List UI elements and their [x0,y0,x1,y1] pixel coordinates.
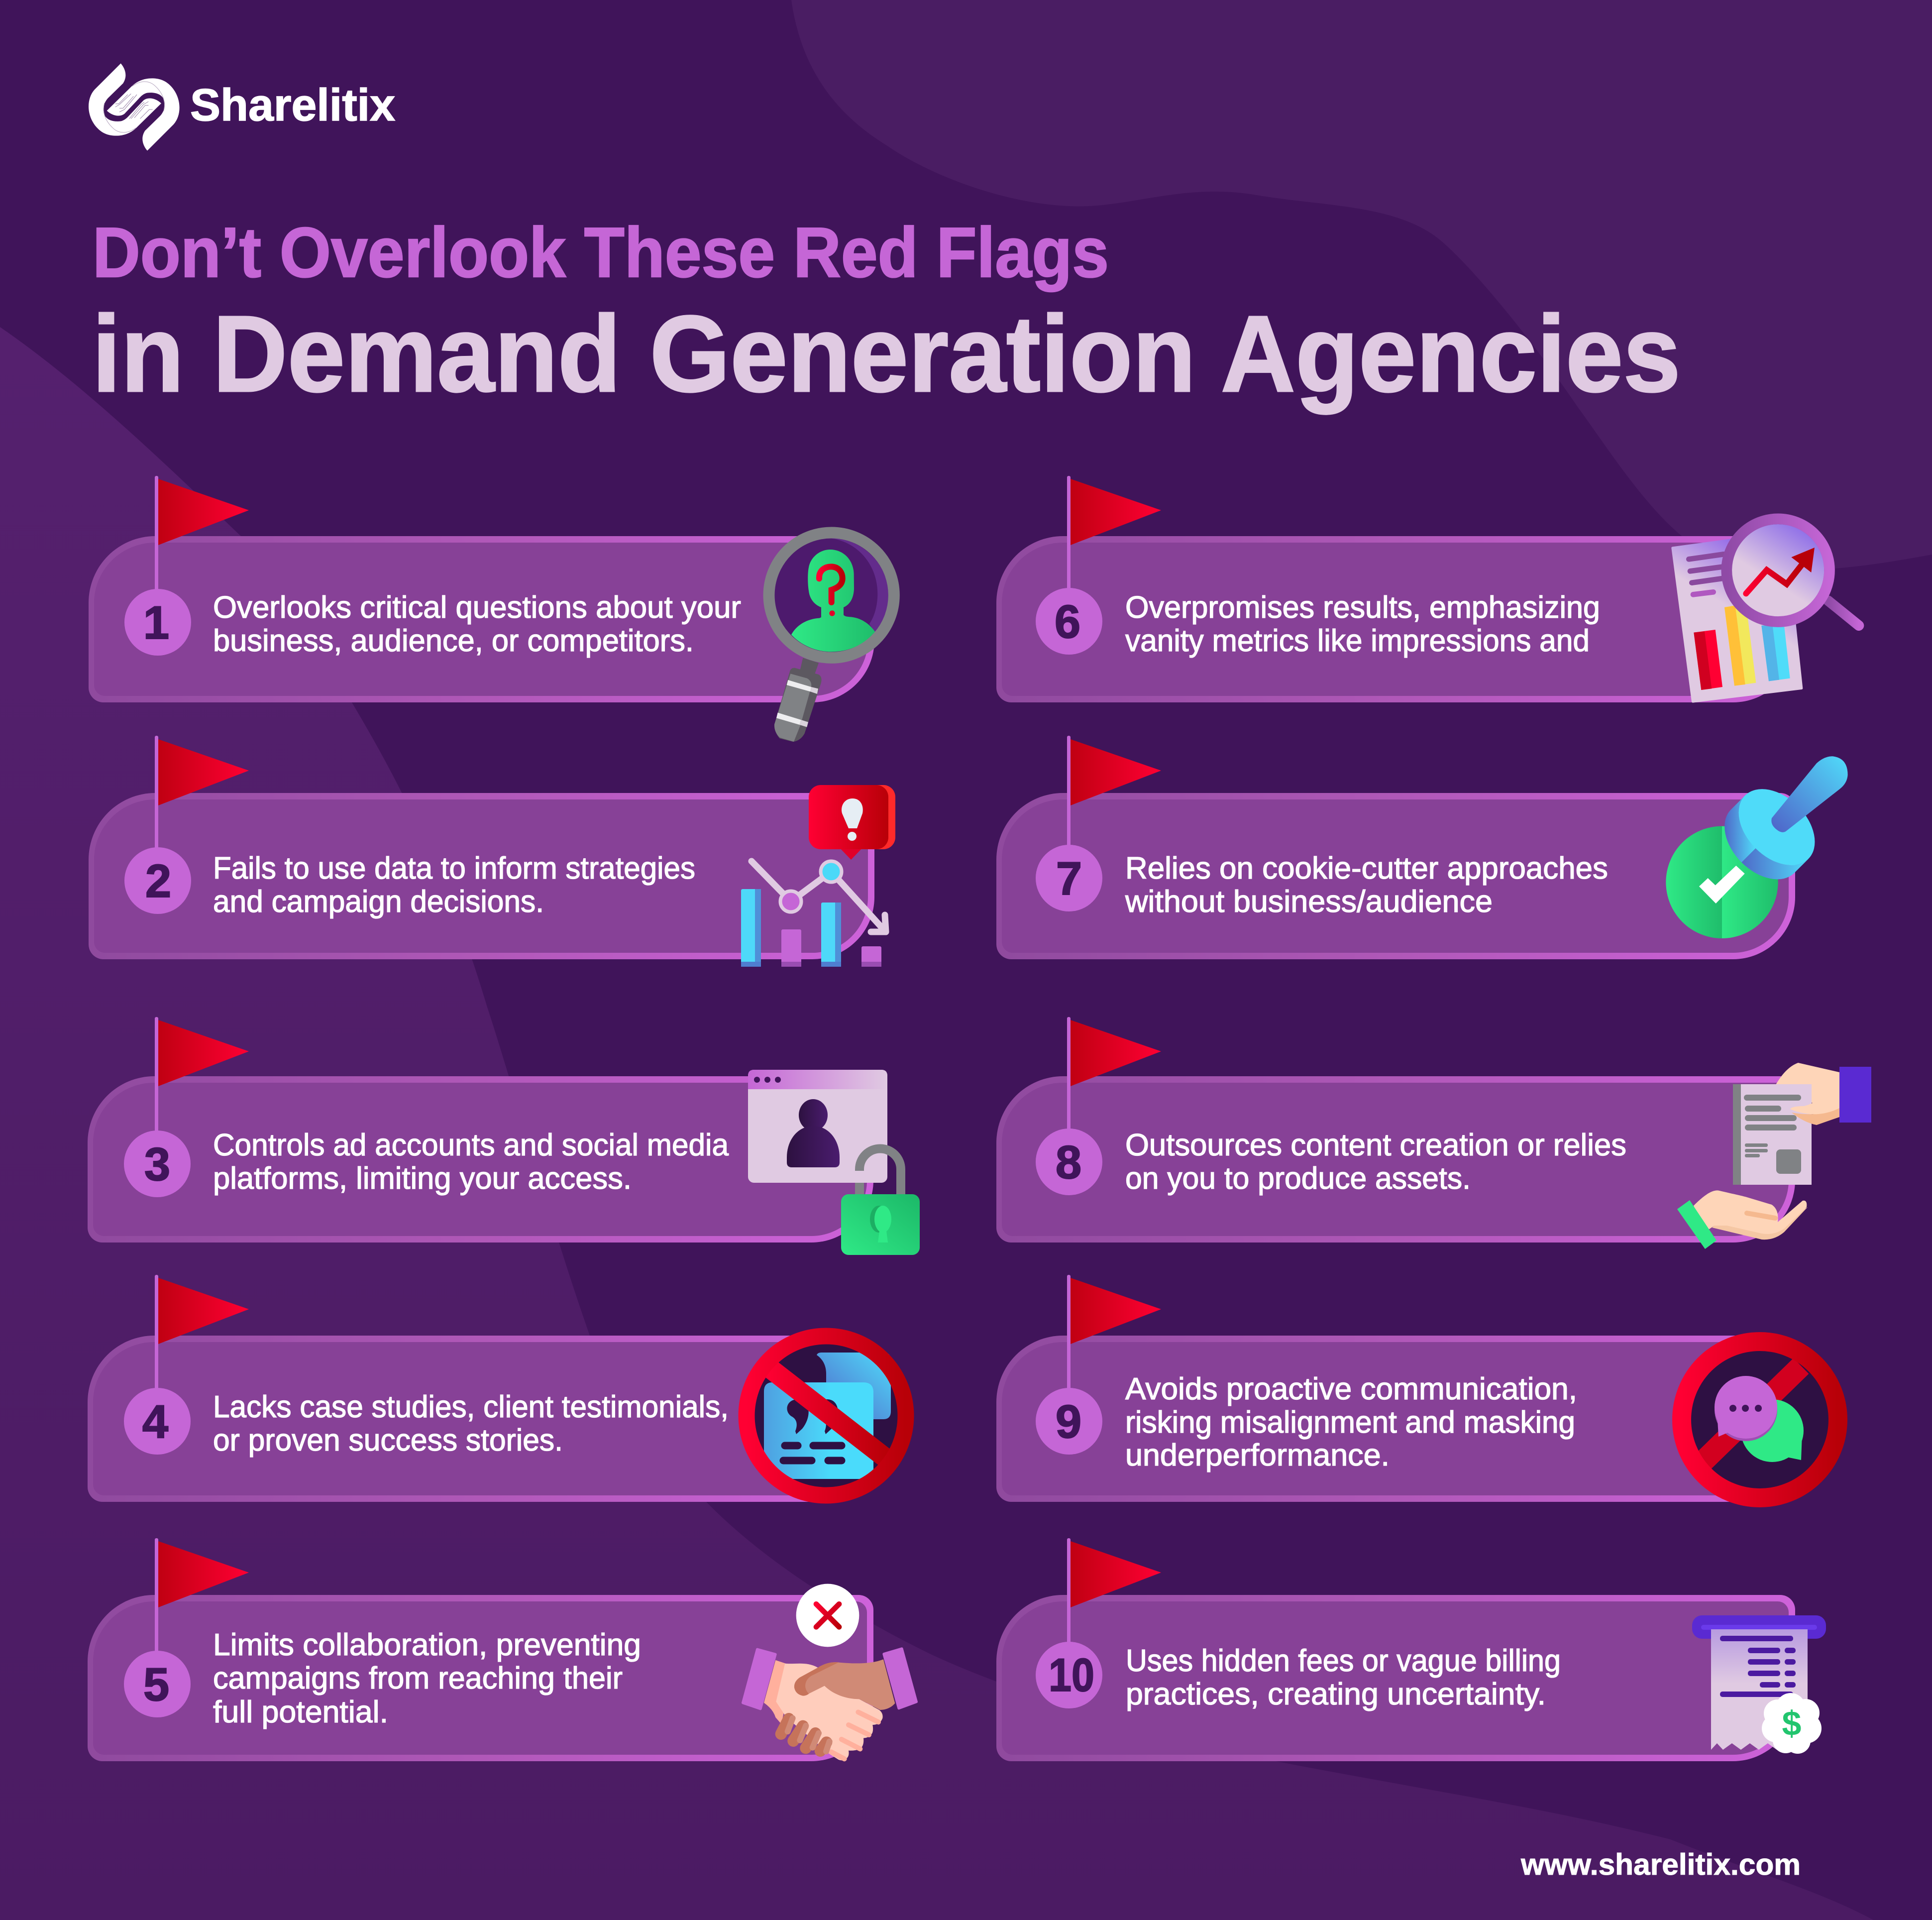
card 6 background [996,536,1795,702]
flag 7 [1067,736,1161,855]
icon: report under magnifier [1673,519,1859,701]
text 6: Overpromises results, emphasizing [1125,590,1600,625]
icon: handshake with cross [743,1584,916,1760]
flag 3 [155,1017,249,1136]
flag 8 [1067,1017,1161,1136]
text 5 [213,1628,641,1729]
number 9: 9 [1056,1395,1081,1448]
panel: red flag 8 [996,1017,1871,1249]
flag 1 [155,476,249,595]
icon: magnifier with unknown person [769,533,894,742]
text 8: Outsources content creation or relies [1125,1128,1626,1162]
icon: logo swirl [89,63,180,151]
text 9: underperformance. [1125,1438,1390,1472]
number 6 [1036,588,1102,655]
flag 4 [155,1275,249,1394]
card 5 background [88,1595,873,1761]
text 7 [1125,851,1608,919]
panel: red flag 6 [996,476,1859,702]
text 8: on you to produce assets. [1125,1161,1471,1196]
number 2: 2 [145,855,171,907]
icon: falling chart with alert [741,785,895,967]
text 7: without business/audience [1125,885,1493,919]
panel: red flag 3 [88,1017,920,1255]
panel: red flag 4 [88,1275,906,1502]
number 7 [1036,845,1102,911]
text 6: vanity metrics like impressions and [1125,624,1590,658]
number 1: 1 [143,596,169,649]
icon: banned testimonials [747,1336,906,1495]
text 1: business, audience, or competitors. [213,624,694,658]
icon: receipt with dollar badge [1692,1615,1826,1754]
icon: hands passing document [1677,1063,1871,1249]
number 3: 3 [144,1138,170,1190]
panel: red flag 5 [88,1538,916,1761]
text 1 [213,590,741,658]
text 3: platforms, limiting your access. [213,1161,632,1196]
text 9: risking misalignment and masking [1125,1405,1575,1440]
text 2: Fails to use data to inform strategies [213,851,695,886]
text 9: Avoids proactive communication, [1125,1372,1577,1406]
text 3 [213,1128,729,1196]
text 10 [1126,1644,1561,1711]
icon: stamp with check [1666,756,1848,938]
card 1 background [89,536,874,702]
title line 1: Don’t Overlook These Red Flags [93,213,1109,292]
text 10: Uses hidden fees or vague billing [1126,1644,1561,1678]
number 8 [1036,1129,1102,1195]
number 10 [1036,1642,1102,1708]
card 7 background [996,793,1795,959]
panel: red flag 10 [996,1538,1826,1761]
logo wordmark: Sharelitix [190,80,395,130]
number 9 [1036,1388,1102,1455]
title [92,213,1681,415]
panel: red flag 7 [996,736,1848,959]
text 5: Limits collaboration, preventing [213,1628,641,1662]
number 1 [124,589,191,656]
number 7: 7 [1056,852,1082,904]
card 10 background [996,1595,1795,1761]
text 2 [213,851,695,919]
card 2 background [89,793,874,959]
icon: banned chat bubbles [1682,1342,1838,1498]
card 9 background [996,1336,1795,1502]
flag 2 [155,736,249,855]
title line 2: in Demand Generation Agencies [92,294,1681,415]
flag 5 [155,1538,249,1658]
card 3 background [88,1076,873,1242]
website url: www.sharelitix.com [1520,1848,1801,1881]
text 6 [1125,590,1600,658]
text 10: practices, creating uncertainty. [1126,1677,1546,1711]
number 6: 6 [1055,595,1080,648]
text 7: Relies on cookie-cutter approaches [1125,851,1608,886]
number 5 [124,1651,191,1717]
text 3: Controls ad accounts and social media [213,1128,729,1162]
flag 10 [1067,1538,1161,1658]
card 4 background [88,1336,873,1502]
text 2: and campaign decisions. [213,885,544,919]
panel: red flag 1 [89,476,894,742]
text 4: Lacks case studies, client testimonials, [213,1390,729,1424]
icon: receipt with dollar badge: $ [1782,1704,1801,1743]
panel: red flag 2 [89,736,895,967]
number 10: 10 [1049,1649,1094,1701]
number 5: 5 [143,1658,169,1710]
number 2 [124,847,191,914]
number 3 [124,1130,191,1197]
icon: locked profile window [748,1070,920,1255]
text 4 [213,1390,729,1458]
number 8: 8 [1056,1136,1081,1188]
card 8 background [996,1076,1795,1242]
text 1: Overlooks critical questions about your [213,590,741,625]
text 5: full potential. [213,1695,388,1729]
number 4 [124,1388,191,1455]
flag 9 [1067,1275,1161,1394]
text 4: or proven success stories. [213,1423,563,1458]
flag 6 [1067,476,1161,595]
logo [89,63,395,151]
number 4: 4 [142,1395,168,1448]
panel: red flag 9 [996,1275,1838,1502]
text 8 [1125,1128,1626,1196]
text 9 [1125,1372,1577,1472]
text 5: campaigns from reaching their [213,1661,623,1695]
